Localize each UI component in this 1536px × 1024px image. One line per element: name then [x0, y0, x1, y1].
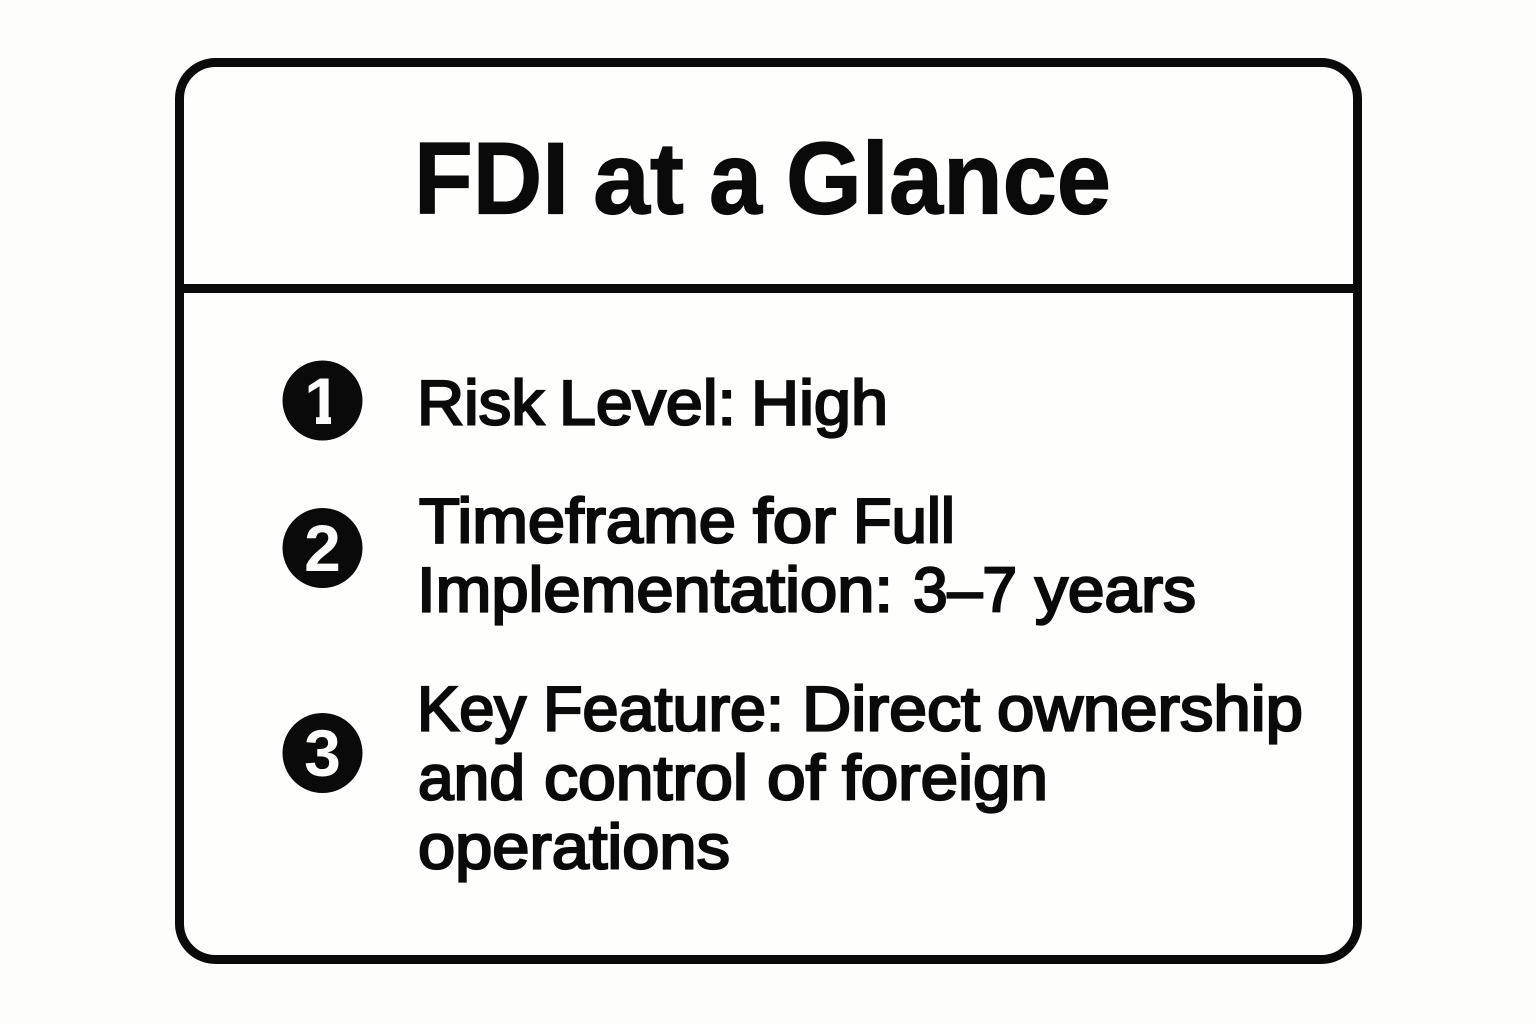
- text: timeframe: Timeframe: [419, 486, 736, 556]
- text: timeframe: Implementation:: [417, 556, 893, 626]
- item 2: timeframe: [282, 486, 1196, 626]
- icon: number 2 badge: 2: [304, 511, 341, 585]
- title: [414, 122, 1111, 236]
- item 1: risk level: [282, 360, 888, 440]
- text: key feature: operations: [418, 812, 730, 882]
- text: timeframe: years: [1035, 556, 1196, 626]
- text: key feature: control: [544, 744, 748, 814]
- icon: number 1 badge: [282, 360, 362, 440]
- text: risk level: [417, 368, 888, 438]
- item 3: key feature: [282, 674, 1303, 882]
- icon: number 3 badge: 3: [304, 716, 341, 790]
- icon: number 1 badge: 1: [304, 364, 341, 438]
- panel: FDI summary card: [180, 62, 1358, 960]
- text: key feature: Direct: [802, 674, 981, 744]
- text: key feature: ownership: [997, 674, 1303, 744]
- title: at: [593, 122, 684, 236]
- icon: number 3 badge: [282, 713, 362, 793]
- text: key feature: Key: [417, 674, 526, 744]
- text: key feature: [417, 674, 1303, 882]
- title: FDI: [414, 122, 569, 236]
- text: key feature: foreign: [842, 744, 1048, 814]
- title: Glance: [786, 122, 1111, 236]
- icon: number 2 badge: [282, 508, 362, 588]
- text: key feature: of: [767, 744, 826, 814]
- text: key feature: and: [418, 744, 525, 814]
- text: risk level: Risk: [417, 368, 545, 438]
- text: key feature: Feature:: [543, 674, 784, 744]
- text: timeframe: for: [753, 486, 836, 556]
- title: a: [709, 122, 763, 236]
- text: timeframe: Full: [853, 486, 955, 556]
- text: timeframe: 3–7: [913, 556, 1017, 626]
- text: timeframe: [417, 486, 1196, 626]
- text: risk level: High: [751, 368, 888, 438]
- text: risk level: Level:: [559, 368, 736, 438]
